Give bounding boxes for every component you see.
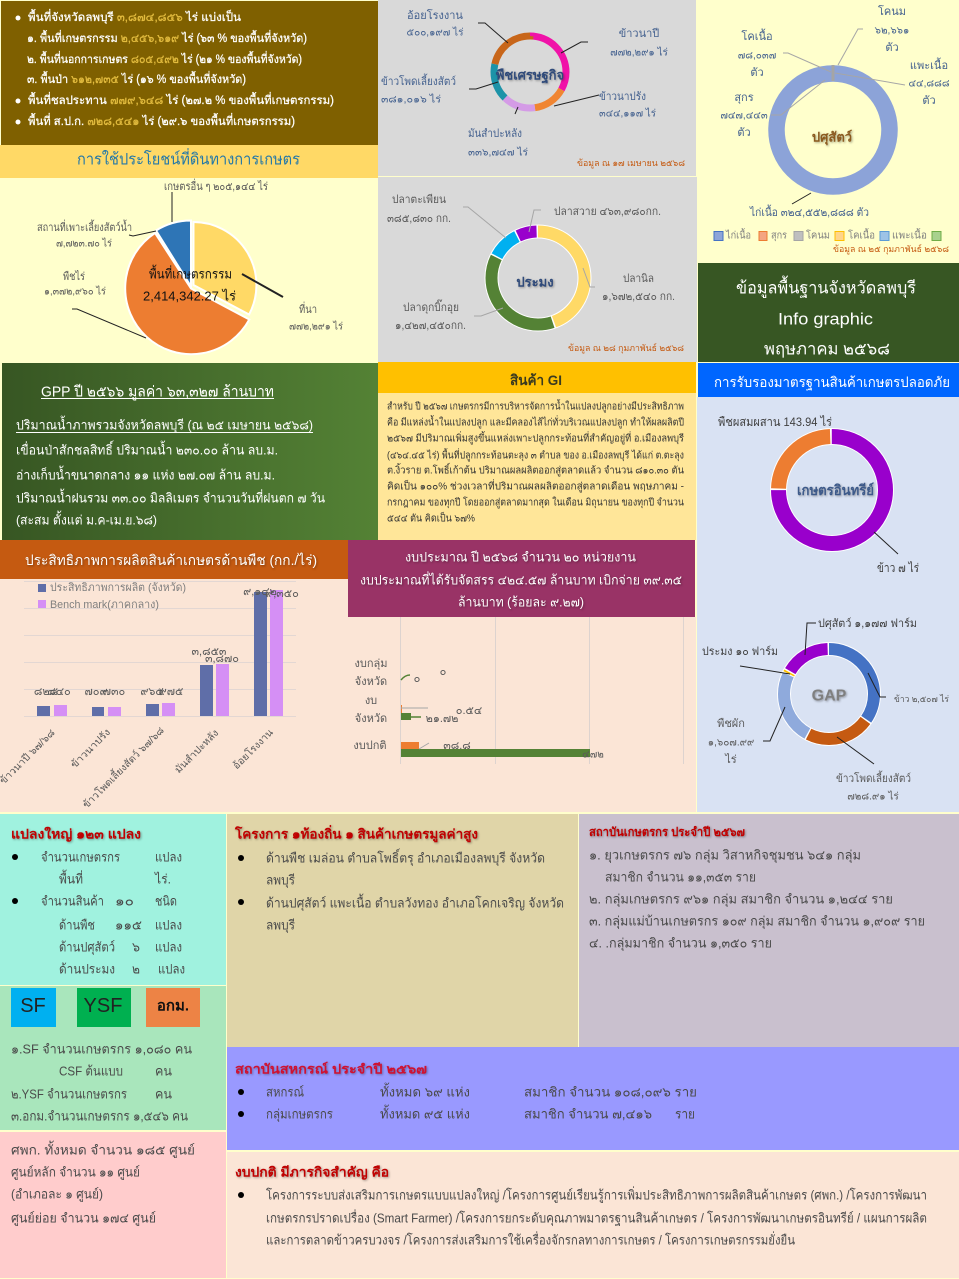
donut chart: livestock — [776, 65, 890, 186]
panel: safety certification: ข้าว ๒,๕๐๗ ไร่ — [894, 694, 949, 704]
panel: budget chart — [348, 540, 696, 812]
legend: livestock: ไก่เนื้อ — [725, 228, 751, 242]
bar chart: ๙,๑๔๒ — [243, 586, 277, 598]
bar chart: ๙,๓๕๐ — [265, 588, 299, 600]
panel: fisheries donut: ๓๘๕,๘๓๐ กก. — [387, 213, 451, 225]
panel: GPP and water: ปริมาณน้ำฝนรวม ๓๓.๐๐ มิลลิเมตร จำนวนวันที่ฝนตก ๗ วัน — [16, 488, 325, 506]
heading: certification: การรับรองมาตรฐานสินค้าเกษตรปลอดภัย — [714, 374, 950, 391]
panel: safety certification — [697, 363, 959, 812]
bar chart: ๗๓๐ — [103, 686, 125, 698]
panel: GPP and water: ปริมาณน้ำภาพรวมจังหวัดลพบุรี (ณ ๒๕ เมษายน ๒๕๖๘) — [16, 416, 313, 434]
bar chart: budget: ๓๘.๘ — [443, 740, 471, 752]
panel: fisheries donut: ข้อมูล ณ ๒๘ กุมภาพันธ์ ๒๕๖๘ — [568, 342, 684, 354]
bar chart: ๓,๘๗๐ — [205, 653, 239, 665]
panel: livestock donut: ปศุสัตว์ — [812, 130, 852, 146]
panel: GPP and water: GPP ปี ๒๕๖๖ มูลค่า ๖๓,๓๒๗ ล้านบาท — [41, 384, 274, 400]
panel: land use pie chart: ๗๗๒,๒๙๑ ไร่ — [289, 320, 344, 332]
panel: large plots: แปลง — [155, 918, 182, 932]
legend: livestock: โคเนื้อ — [848, 228, 875, 242]
panel: learning centers: ศูนย์หลัก จำนวน ๑๑ ศูนย์ — [11, 1164, 140, 1180]
panel: one community one product: ลพบุรี — [266, 918, 295, 934]
panel: large plots: แปลง — [158, 962, 185, 976]
legend: livestock — [714, 228, 941, 242]
panel: large plots: ด้านประมง — [59, 962, 115, 976]
bar chart: ๙๖๕ — [140, 686, 164, 698]
panel: fisheries donut: ๑,๔๒๗,๔๕๐กก. — [395, 320, 466, 332]
panel: title block — [698, 263, 959, 362]
panel: one community one product: ด้านปศุสัตว์ แพะเนื้อ ตำบลวังทอง อำเภอโคกเจริญ จังหวัด — [266, 894, 564, 912]
panel: livestock donut: โคเนื้อ — [741, 28, 773, 43]
panel: budget chart: งบประมาณที่ได้รับจัดสรร ๔๒๔.๕๗ ล้านบาท เบิกจ่าย ๓๙.๓๕ — [360, 572, 682, 588]
text block: GI description: ๒๕๖๗ มีปริมาณเพิ่มสูงขึ้นแหล่งเพาะปลูกกระท้อนที่สำคัญอยู่ที่ อ.เมืองลพบุรี — [387, 430, 685, 444]
panel: large plots: แปลง — [155, 940, 182, 954]
panel: large plots: ด้านพืช — [59, 918, 95, 932]
panel: fisheries donut: ปลานิล — [623, 273, 654, 285]
panel: SF YSF farmers: CSF ต้นแบบ — [59, 1064, 123, 1078]
date: พฤษภาคม ๒๕๖๘ — [764, 340, 890, 358]
panel: livestock donut: ตัว — [922, 95, 936, 107]
panel: large plots: พื้นที่ — [59, 870, 83, 886]
panel: GPP and water: อ่างเก็บน้ำขนาดกลาง ๑๑ แห่ง ๒๗.๐๗ ล้าน ลบ.ม. — [16, 466, 275, 482]
panel: large plots: ๖ — [132, 940, 140, 954]
title: ข้อมูลพื้นฐานจังหวัดลพบุรี — [736, 276, 916, 298]
panel: land use pie chart: พื้นที่เกษตรกรรม — [149, 264, 232, 282]
bar chart: ๗๐๙ — [84, 686, 108, 698]
panel: economic crops donut: ๓๔๔,๑๑๗ ไร่ — [599, 108, 657, 120]
bar chart: budget: งบปกติ — [353, 740, 387, 752]
bar chart: budget: งบกลุ่ม — [354, 658, 388, 670]
panel: livestock donut: ไก่เนื้อ ๓๒๔,๕๕๒,๘๘๘ ตัว — [749, 204, 869, 219]
panel: land use pie chart: ๗,๗๒๓.๗๐ ไร่ — [56, 238, 113, 250]
panel: safety certification: ๑,๖๐๗.๙๙ — [708, 738, 754, 748]
panel: large plots: ด้านปศุสัตว์ — [59, 940, 115, 956]
panel: economic crops donut: ๓๓๖,๗๔๗ ไร่ — [468, 146, 529, 158]
panel: GPP and water: เขื่อนป่าสักชลสิทธิ์ ปริมาณน้ำ ๒๓๐.๐๐ ล้าน ลบ.ม. — [16, 440, 278, 458]
panel: learning centers: ศพก. ทั้งหมด จำนวน ๑๘๕ ศูนย์ — [11, 1140, 195, 1158]
panel: fisheries donut: ปลาตะเพียน — [392, 193, 446, 206]
panel: fisheries donut: ๑,๖๗๒,๕๔๐ กก. — [602, 291, 675, 303]
panel: livestock donut: ตัว — [737, 127, 751, 139]
panel: economic crops donut: ข้าวนาปรัง — [599, 91, 646, 103]
panel: cooperatives: ราย — [675, 1106, 695, 1122]
panel: cooperatives — [227, 1047, 959, 1150]
panel: cooperatives: สมาชิก จำนวน ๗,๔๑๖ — [524, 1106, 652, 1122]
panel: one community one product — [227, 814, 578, 1047]
panel: cooperatives: กลุ่มเกษตรกร — [266, 1106, 333, 1122]
panel: land use pie chart: 2,414,342.27 ไร่ — [143, 288, 236, 304]
text block: GI description — [387, 398, 685, 524]
badge: YSF — [77, 988, 131, 1027]
panel: land use pie chart: พืชไร่ — [63, 270, 85, 283]
bar chart: budget: จังหวัด — [355, 713, 387, 725]
text block: GI description: สำหรับ ปี ๒๕๖๗ เกษตรกรมีการบริหารจัดการน้ำในแปลงปลูกอย่างมีประสิทธิภาพ — [387, 398, 684, 412]
panel: learning centers — [0, 1132, 226, 1278]
panel: learning centers: ศูนย์ย่อย จำนวน ๑๗๔ ศูนย์ — [11, 1210, 156, 1226]
panel: livestock donut: ๔๔,๘๘๘ — [908, 78, 950, 90]
panel: livestock donut: ตัว — [885, 42, 899, 54]
panel: cooperatives: สมาชิก จำนวน ๑๐๘,๐๙๖ ราย — [524, 1084, 697, 1100]
panel: one community one product: ด้านพืช เมล่อน ตำบลโพธิ์ตรุ อำเภอเมืองลพบุรี จังหวัด — [266, 848, 545, 866]
panel: one community one product: ลพบุรี — [266, 872, 295, 888]
panel: safety certification: ประมง ๑๐ ฟาร์ม — [702, 645, 778, 658]
panel: safety certification: ปศุสัตว์ ๑,๑๗๗ ฟาร์ม — [818, 617, 917, 630]
panel: economic crops donut: อ้อยโรงงาน — [407, 8, 463, 22]
panel: safety certification: ๗๒๘.๙๑ ไร่ — [847, 790, 899, 802]
panel: economic crops donut: พืชเศรษฐกิจ — [496, 68, 564, 84]
text block: GI description: ๕๔๔ ตัน คิดเป็น ๖๗% — [387, 510, 475, 524]
panel: economic crops donut: ข้าวโพดเลี้ยงสัตว์ — [381, 73, 456, 88]
panel: budget chart: ล้านบาท (ร้อยละ ๙.๒๗) — [458, 594, 584, 610]
panel: land area summary: พื้นที่ ส.ป.ก. ๗๒๘,๕๔๑ ไร่ (๒๙.๖ ของพื้นที่เกษตรกรรม) — [28, 113, 295, 128]
bar chart: budget: ๐ — [414, 673, 420, 685]
panel: large plots: ไร่. — [154, 872, 171, 886]
panel: livestock donut — [698, 0, 959, 263]
badge: SF — [11, 988, 56, 1027]
panel: livestock donut: สุกร — [734, 92, 754, 104]
text block: GI description: ต.งิ้วราย ต.โพธิ์เก้าต้น ปริมาณผลผลิตออกสู่ตลาดแล้ว จำนวน ๘๑๐.๓๐ ตัน — [387, 462, 684, 476]
bar chart: ข้าวนาปรัง — [68, 726, 113, 771]
bar chart: budget: ๐.๕๔ — [456, 705, 482, 717]
panel: livestock donut: ๗๘,๐๓๗ — [738, 50, 776, 62]
panel: learning centers: (อำเภอละ ๑ ศูนย์) — [11, 1186, 103, 1202]
heading: productivity: ประสิทธิภาพการผลิตสินค้าเกษตรด้านพืช (กก./ไร่) — [25, 552, 317, 568]
panel: economic crops donut: ข้าวนาปี — [619, 27, 659, 40]
heading: cooperatives: สถาบันสหกรณ์ ประจำปี ๒๕๖๗ — [235, 1062, 427, 1076]
panel: large plots: ๑๐ — [115, 894, 134, 908]
text block: GI description: กรกฎาคม ของทุกปี โดยออกสู่ตลาดมากสุด ในเดือน มิถุนายน ของทุกปี จำนวน — [387, 496, 684, 508]
badge: อกม. — [146, 988, 200, 1027]
panel: safety certification: ข้าว ๗ ไร่ — [877, 561, 919, 575]
panel: economic crops donut: ๕๐๐,๑๙๗ ไร่ — [407, 26, 464, 38]
panel: economic crops donut: ๓๘๑,๐๑๖ ไร่ — [381, 94, 442, 106]
legend: livestock: สุกร — [771, 230, 788, 242]
panel: economic crops donut: มันสำปะหลัง — [468, 128, 522, 140]
bar chart: ๘๒๘ — [34, 686, 58, 698]
heading: missions: งบปกติ มีภารกิจสำคัญ คือ — [235, 1164, 389, 1180]
panel: livestock donut: โคนม — [878, 4, 906, 18]
badge: SF: SF — [20, 995, 46, 1017]
legend: livestock: แพะเนื้อ — [892, 228, 927, 242]
panel: farmer institutions: ๓. กลุ่มแม่บ้านเกษตรกร ๑๐๙ กลุ่ม สมาชิก จำนวน ๑,๙๐๙ ราย — [589, 914, 925, 930]
heading: GI: สินค้า GI — [510, 372, 562, 388]
pie chart — [125, 220, 256, 354]
panel: large plots: จำนวนสินค้า — [41, 894, 104, 908]
bar chart: budget: ๐ — [440, 666, 446, 678]
heading: large plots: แปลงใหญ่ ๑๒๓ แปลง — [11, 826, 141, 842]
panel: livestock donut: แพะเนื้อ — [910, 57, 948, 72]
heading: budget: งบประมาณ ปี ๒๕๖๘ จำนวน ๒๐ หน่วยงาน — [405, 550, 636, 564]
panel: safety certification: ข้าวโพดเลี้ยงสัตว์ — [836, 770, 911, 785]
panel: land use pie chart: สถานที่เพาะเลี้ยงสัตว์น้ำ — [37, 219, 132, 234]
panel: land area summary — [1, 1, 378, 145]
bar chart: ข้าวโพดเลี้ยงสัตว์ ๖๗/๖๘ — [79, 723, 167, 811]
panel: economic crops donut: ๗๗๒,๒๙๑ ไร่ — [610, 46, 669, 58]
panel: land use pie chart: ที่นา — [299, 301, 317, 316]
badge: YSF: YSF — [84, 995, 122, 1017]
panel: fisheries donut: ปลาสวาย ๔๖๓,๙๘๐กก. — [554, 206, 661, 218]
panel: large plots: ชนิด — [155, 894, 177, 908]
panel: SF YSF farmers: คน — [155, 1086, 172, 1102]
subtitle: Info graphic — [778, 310, 874, 328]
bar chart: ๙๗๕ — [159, 686, 183, 698]
bar chart: อ้อยโรงงาน — [230, 726, 276, 772]
heading: agricultural land use — [0, 145, 378, 178]
bar chart: ๘๔๐ — [47, 686, 71, 698]
text block: GI description: คือ มีแหล่งน้ำในแปลงปลูก และมีคลองไส้ไก่ทั่วบริเวณแปลงปลูก ทำให้ผลผลิตปี — [387, 414, 684, 428]
panel: GPP and water: (สะสม ตั้งแต่ ม.ค-เม.ย.๖๘) — [16, 510, 157, 528]
panel: economic crops donut: ข้อมูล ณ ๑๗ เมษายน ๒๕๖๘ — [577, 158, 685, 169]
panel: land use pie chart: เกษตรอื่น ๆ ๒๐๕,๑๔๔ ไร่ — [164, 178, 268, 193]
bar chart: budget: จังหวัด — [355, 676, 387, 688]
panel: safety certification: GAP — [812, 688, 847, 704]
panel: fisheries donut: ปลาดุกบิ๊กอุย — [403, 299, 459, 314]
panel: safety certification: เกษตรอินทรีย์ — [797, 482, 874, 498]
panel: cooperatives: สหกรณ์ — [266, 1084, 304, 1100]
heading: agricultural land use: การใช้ประโยชน์ที่ดินทางการเกษตร — [77, 148, 300, 168]
panel: large plots: ๒ — [132, 962, 140, 976]
panel: SF YSF farmers: ๒.YSF จำนวนเกษตรกร — [11, 1086, 127, 1102]
legend: productivity: ประสิทธิภาพการผลิต (จังหวัด) — [50, 582, 186, 594]
legend: productivity — [38, 582, 186, 611]
panel: SF YSF farmers: คน — [155, 1064, 172, 1078]
panel: SF YSF farmers — [0, 986, 226, 1130]
panel: livestock donut: ๗๔๗,๔๔๓ — [720, 110, 768, 122]
badge: อกม.: อกม. — [157, 998, 189, 1014]
heading: institutions: สถาบันเกษตรกร ประจำปี ๒๕๖๗ — [589, 825, 745, 839]
donut chart: GAP — [784, 649, 874, 739]
donut chart: fisheries — [492, 232, 584, 324]
panel: fisheries donut: ประมง — [516, 274, 554, 290]
panel: farmer institutions: ๔. .กลุ่มมาชิก จำนวน ๑,๓๕๐ ราย — [589, 936, 772, 952]
panel: economic crops donut — [378, 0, 696, 176]
panel: large plots: แปลง — [155, 850, 182, 864]
bar chart: budget: ๒๑.๗๒ — [426, 713, 458, 725]
panel: livestock donut: ๖๒,๖๖๑ — [875, 26, 909, 36]
panel: crop productivity chart — [0, 540, 348, 812]
panel: large plots: ๑๑๕ — [115, 918, 142, 932]
panel: large plots: จำนวนเกษตรกร — [41, 850, 120, 864]
bar chart: ๓,๘๕๓ — [192, 646, 226, 658]
panel: GI products — [378, 362, 696, 540]
panel: regular budget missions: และการตลาดข้าวครบวงจร /โครงการส่งเสริมการใช้เครื่องจักรกลทางการเกษตร / โครงการเกษตรกรรมยั่งยืน — [266, 1232, 795, 1248]
panel: cooperatives: ทั้งหมด ๙๕ แห่ง — [380, 1104, 470, 1122]
text block: GI description: คิดเป็น ๑๐๐% ช่วงเวลาที่ปริมาณผลผลิตออกสู่ตลาดเดือน พฤษภาคม - — [387, 478, 684, 492]
panel: large plots — [0, 814, 226, 985]
panel: livestock donut: ตัว — [750, 67, 764, 79]
bar chart: budget — [353, 617, 684, 764]
panel: land area summary: ๓. พื้นป่า ๖๑๒,๗๓๕ ไร่ (๑๖ % ของพื้นที่จังหวัด) — [27, 71, 246, 86]
donut chart: economic crops — [494, 36, 566, 108]
bar chart: budget: งบ — [365, 695, 377, 707]
panel: farmer institutions: ๑. ยุวเกษตรกร ๗๖ กลุ่ม วิสาหกิจชุมชน ๖๔๑ กลุ่ม — [589, 848, 861, 864]
panel: safety certification: พืชผัก — [717, 717, 745, 730]
panel: land use pie chart — [0, 178, 378, 362]
panel: farmer institutions — [579, 814, 959, 1047]
panel: fisheries donut — [378, 177, 697, 362]
bar chart — [0, 582, 299, 811]
panel: SF YSF farmers: ๑.SF จำนวนเกษตรกร ๑,๐๘๐ คน — [11, 1042, 192, 1056]
panel: GPP and water — [2, 363, 378, 540]
heading: OTOP project: โครงการ ๑ท้องถิ่น ๑ สินค้าเกษตรมูลค่าสูง — [234, 824, 478, 842]
panel: farmer institutions: ๒. กลุ่มเกษตรกร ๙๖๑ กลุ่ม สมาชิก จำนวน ๑,๒๔๔ ราย — [589, 892, 893, 908]
panel: regular budget missions — [227, 1152, 959, 1278]
panel: land area summary: ๒. พื้นที่นอกการเกษตร ๘๐๕,๔๙๒ ไร่ (๒๑ % ของพื้นที่จังหวัด) — [27, 51, 302, 66]
panel: safety certification: พืชผสมผสาน 143.94 ไร่ — [718, 415, 833, 429]
bar chart: มันสำปะหลัง — [173, 728, 221, 776]
panel: farmer institutions: สมาชิก จำนวน ๑๑,๓๕๓ ราย — [605, 870, 756, 884]
text block: GI description: (๔๖๔.๔๕ ไร่) พื้นที่ปลูกกระท้อนตะลุง ๓ ตำบล ของ อ.เมืองลพบุรี ได้แก่ ต.ตะลุง — [387, 448, 684, 462]
legend: productivity: Bench mark(ภาคกลาง) — [50, 599, 159, 611]
panel: land area summary: พื้นที่จังหวัดลพบุรี ๓,๘๗๔,๘๕๖ ไร่ แบ่งเป็น — [28, 9, 241, 24]
panel: safety certification: ไร่ — [724, 753, 737, 766]
panel: SF YSF farmers: ๓.อกม.จำนวนเกษตรกร ๑,๕๔๖ คน — [11, 1108, 188, 1124]
panel: land area summary: พื้นที่ชลประทาน ๗๗๙,๖๔๘ ไร่ (๒๗.๒ % ของพื้นที่เกษตรกรรม) — [28, 92, 334, 107]
panel: land area summary: ๑. พื้นที่เกษตรกรรม ๒,๔๕๖,๖๑๙ ไร่ (๖๓ % ของพื้นที่จังหวัด) — [27, 30, 307, 45]
bar chart: budget: ๔๗๒ — [582, 750, 604, 760]
donut chart: organic — [778, 436, 886, 544]
legend: livestock: โคนม — [806, 228, 830, 242]
panel: cooperatives: ทั้งหมด ๖๙ แห่ง — [380, 1082, 470, 1100]
panel: land use pie chart: ๑,๓๗๒,๙๖๐ ไร่ — [44, 286, 107, 298]
panel: livestock donut: ข้อมูล ณ ๒๕ กุมภาพันธ์ ๒๕๖๘ — [833, 243, 949, 255]
